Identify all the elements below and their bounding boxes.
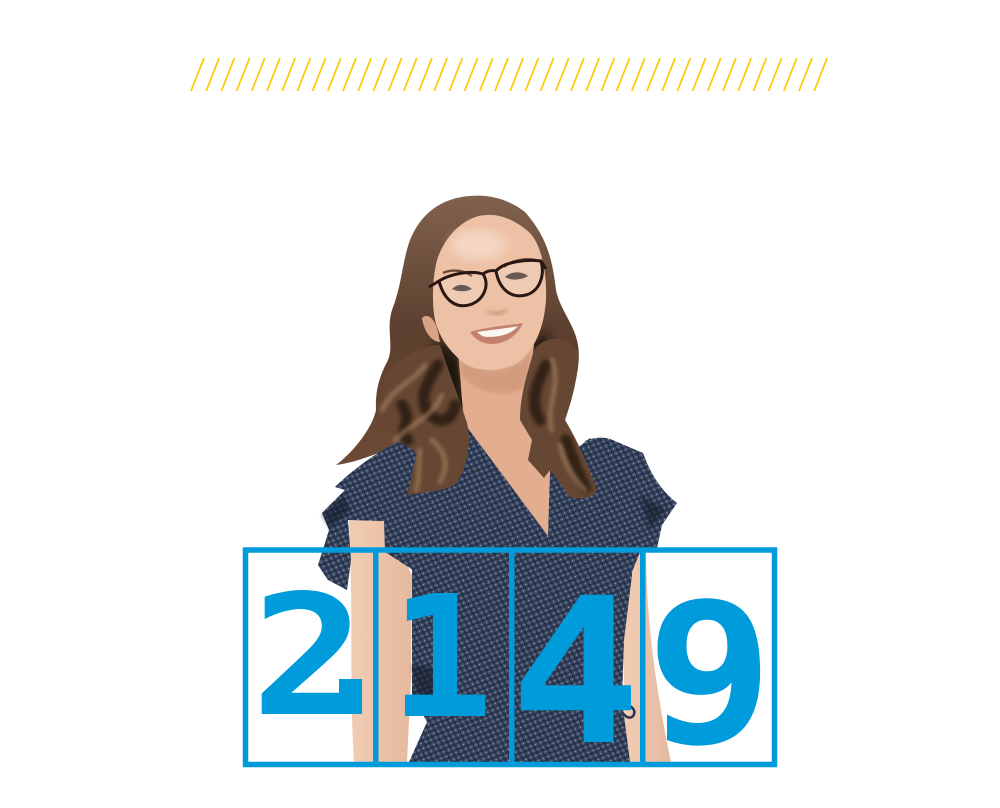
lips (470, 323, 523, 344)
right arm (622, 540, 671, 762)
nose (485, 307, 509, 315)
eyebrows (443, 259, 536, 276)
right sleeve (585, 438, 677, 572)
digit 2: 2 (251, 560, 366, 754)
cell divider 3 (640, 550, 646, 764)
blue number box with four cells (246, 550, 774, 790)
cell divider 1 (373, 550, 378, 764)
hair dark strands (402, 365, 586, 488)
dress body (409, 427, 632, 762)
hair light strands (382, 360, 585, 490)
ear (422, 316, 440, 342)
face (433, 215, 546, 370)
eyes (452, 272, 528, 291)
smile teeth (477, 326, 518, 337)
cell divider 2 (509, 550, 514, 764)
neck (458, 345, 550, 538)
digit 1: 1 (389, 560, 494, 756)
digit 9: 9 (646, 562, 774, 789)
right hair lock (520, 339, 597, 498)
left sleeve (318, 438, 440, 590)
forehead highlight (450, 230, 506, 260)
digit 2 upturned serif (339, 679, 362, 714)
portrait photo of woman with glasses (318, 196, 677, 762)
outer frame (246, 550, 774, 764)
glasses (429, 260, 546, 306)
waist tie (622, 705, 634, 718)
dress shadow (322, 495, 665, 705)
decorative yellow slash band (191, 58, 827, 91)
dark hair shadow (419, 330, 556, 430)
hair back (336, 196, 579, 465)
neck shadow (459, 350, 532, 394)
left arm (349, 520, 412, 762)
left hair lock (383, 345, 469, 495)
digit 4: 4 (510, 555, 641, 790)
